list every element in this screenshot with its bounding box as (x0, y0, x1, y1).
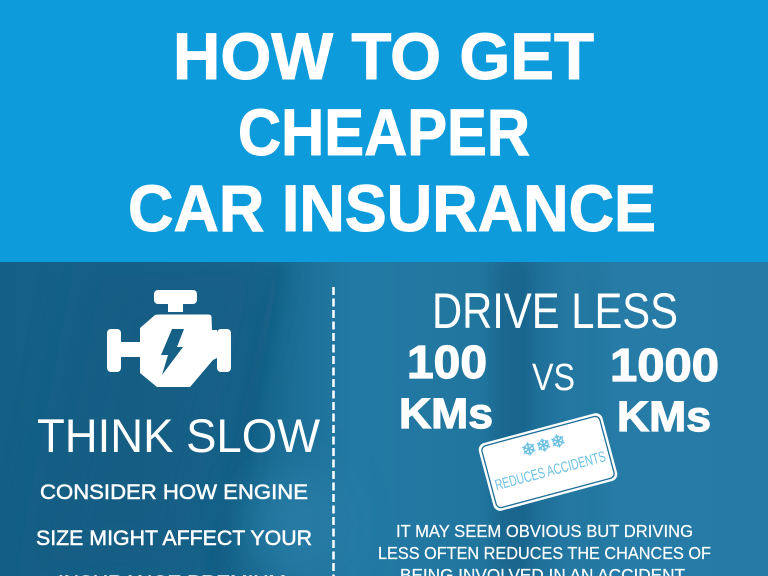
stat: 100 kms (399, 336, 493, 438)
heading: think slow: THINK SLOW (37, 409, 321, 462)
panel: think slow (36, 290, 321, 576)
stat: 1000 kms: 1000 (610, 339, 719, 391)
icon: engine (107, 290, 231, 387)
label: vs: VS (532, 357, 575, 399)
panel: title banner (0, 0, 768, 262)
text: driving advice: LESS OFTEN REDUCES THE CHANCES OF (378, 543, 711, 563)
stat: 1000 kms: KMs (617, 393, 711, 441)
text: driving advice (378, 521, 711, 576)
text: engine size advice: SIZE MIGHT AFFECT YOUR (36, 527, 312, 550)
icon: lightning bolt (161, 329, 184, 375)
text: engine size advice: CONSIDER HOW ENGINE (40, 481, 308, 504)
heading: drive less: DRIVE LESS (432, 283, 678, 339)
title line 1: HOW TO GET (173, 19, 594, 93)
stat: 100 kms: 100 (407, 336, 487, 388)
text: driving advice: IT MAY SEEM OBVIOUS BUT DRIVING (396, 521, 693, 541)
title line 2: CHEAPER (238, 95, 530, 169)
panel: drive less (378, 283, 719, 576)
stat: 100 kms: KMs (399, 390, 493, 438)
text: engine size advice (36, 481, 312, 576)
stamp label: REDUCES ACCIDENTS (493, 448, 608, 494)
stamp stars: ❄❄❄ (519, 430, 568, 462)
stat: 1000 kms (610, 339, 719, 441)
stamp: reduces accidents (477, 412, 619, 512)
divider: dashed line (332, 287, 335, 576)
panel: photo background (0, 262, 768, 576)
title line 3: CAR INSURANCE (128, 171, 656, 245)
